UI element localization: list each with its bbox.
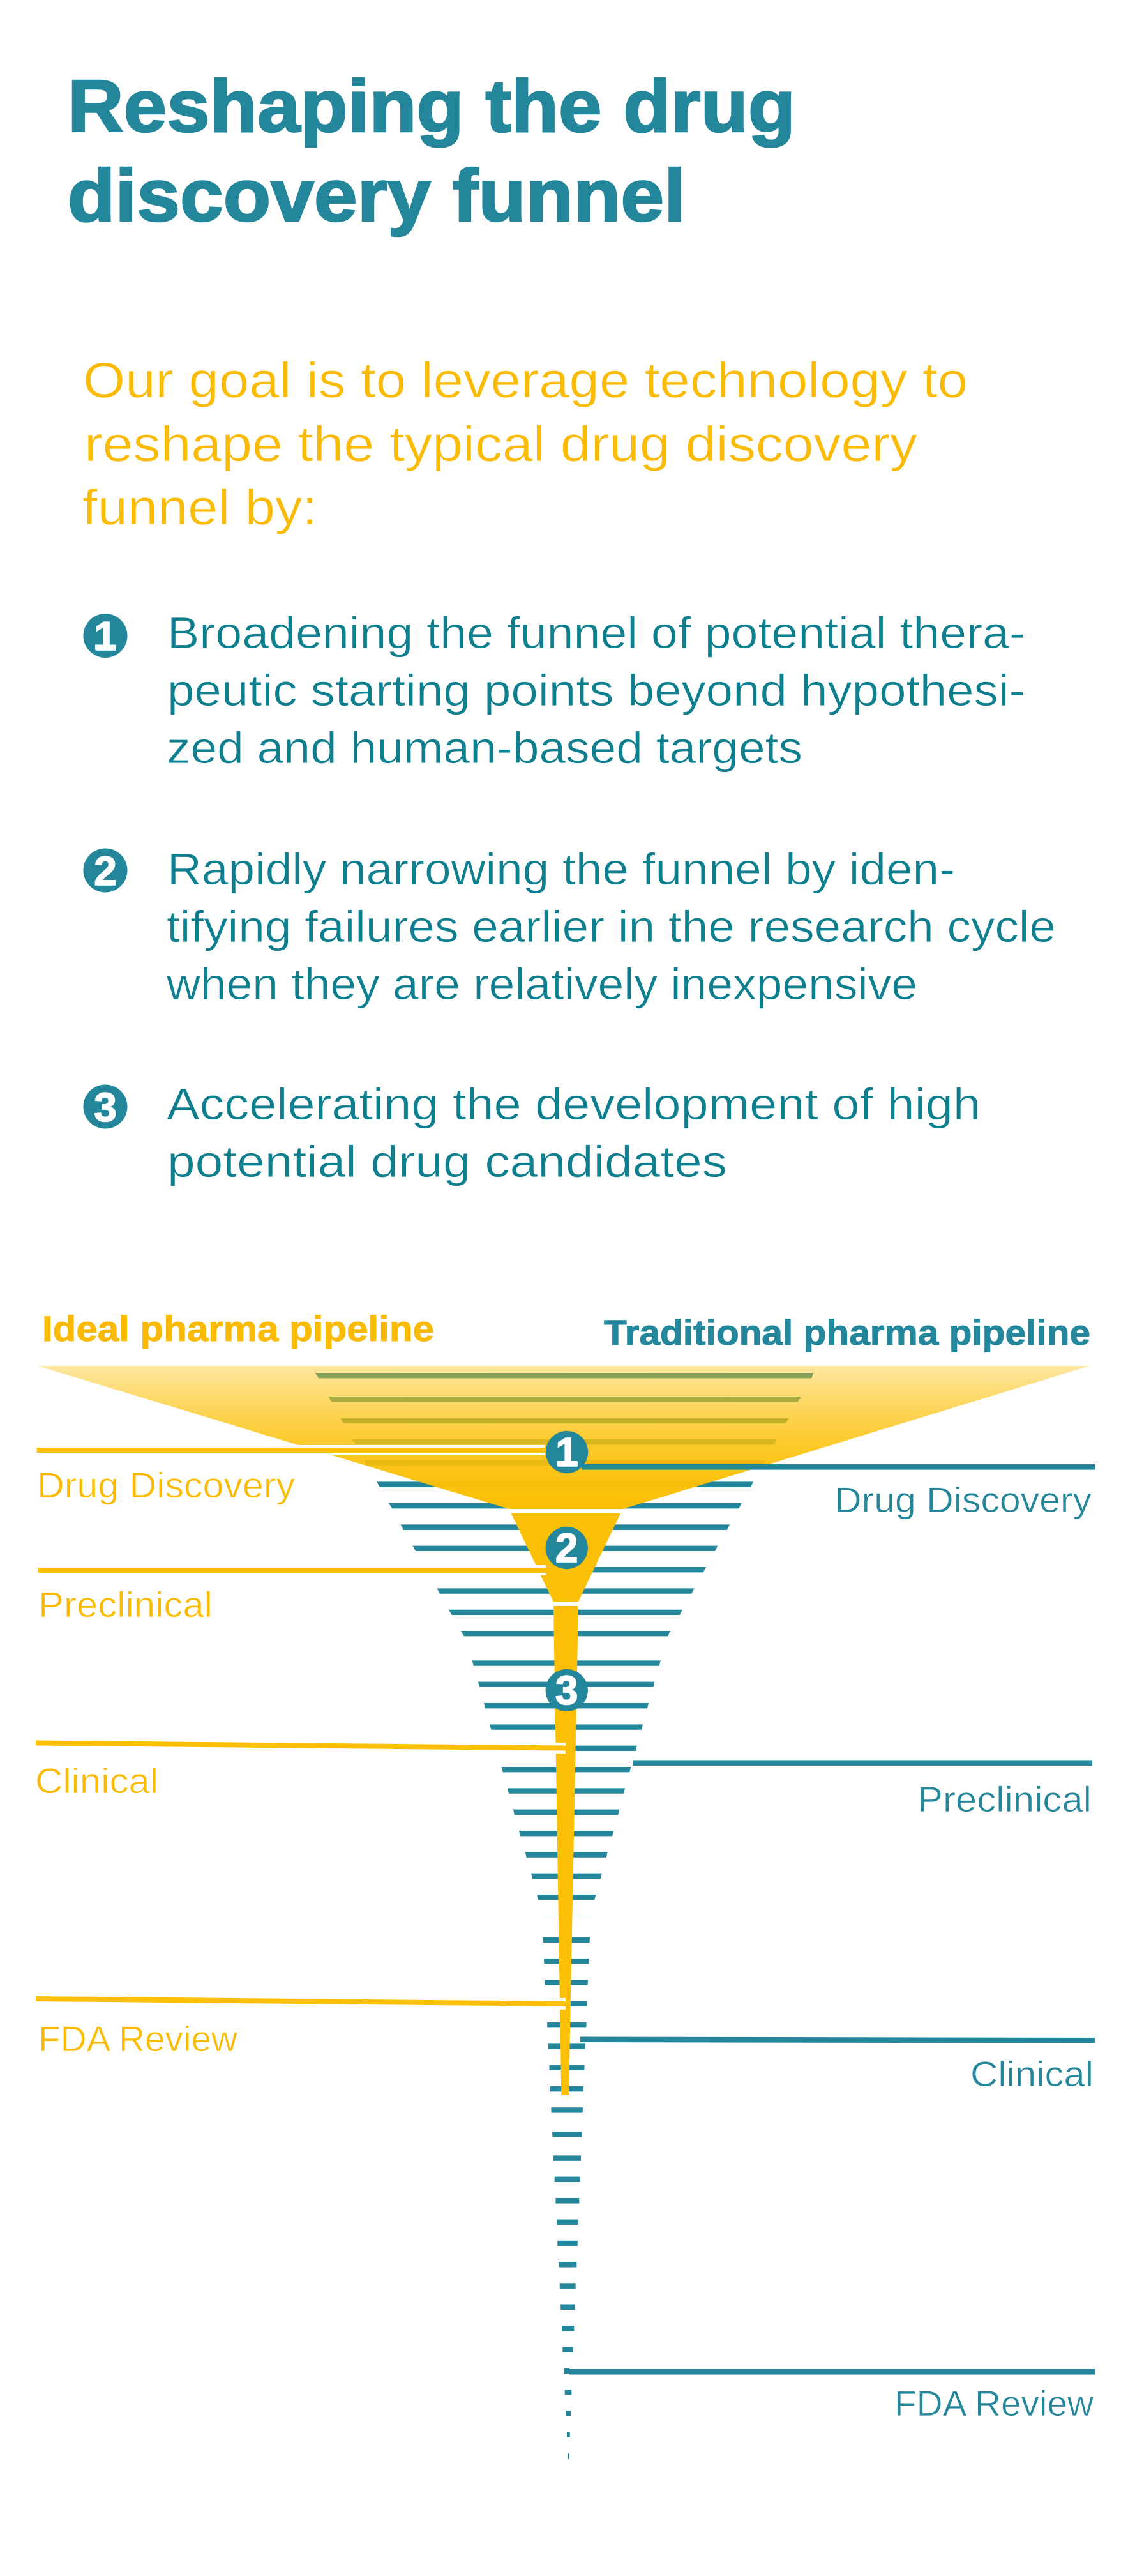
icon: number 2: 2	[94, 848, 117, 894]
intro text: reshape the typical drug discovery	[84, 416, 917, 472]
traditional pipeline labels	[834, 1480, 1094, 2423]
item 1 text: zed and human-based targets	[167, 723, 802, 773]
item 2 text: tifying failures earlier in the research cycle	[167, 902, 1056, 951]
ideal funnel: clinical stalk	[553, 1606, 578, 2095]
heading: traditional pipeline: Traditional pharma pipeline	[604, 1312, 1090, 1352]
list item 1	[83, 608, 1025, 773]
item 1 text: peutic starting points beyond hypothesi-	[167, 665, 1025, 715]
traditional pipeline labels: Clinical	[970, 2054, 1094, 2094]
intro text: Our goal is to leverage technology to	[83, 352, 968, 408]
icon: number 2	[83, 848, 128, 894]
item 2 text: Rapidly narrowing the funnel by iden-	[167, 844, 955, 894]
intro text	[82, 352, 968, 535]
funnel number 2: 2	[555, 1525, 578, 1571]
title: Reshaping the drug	[68, 64, 795, 148]
traditional funnel bars	[315, 1373, 814, 2459]
title	[68, 64, 795, 237]
funnel number 1: 1	[555, 1429, 578, 1475]
title: discovery funnel	[68, 154, 686, 237]
traditional pipeline labels: Drug Discovery	[834, 1480, 1092, 1520]
traditional pipeline stage markers	[569, 1464, 1095, 2374]
list item 2	[83, 844, 1056, 1009]
funnel number 1	[546, 1429, 588, 1475]
intro text: funnel by:	[82, 479, 317, 535]
item 3 text: potential drug candidates	[167, 1137, 727, 1186]
item 1 text: Broadening the funnel of potential thera-	[167, 608, 1025, 658]
traditional pipeline labels: Preclinical	[917, 1779, 1092, 1819]
ideal funnel: discovery stage	[38, 1366, 1090, 1509]
funnel number 2	[545, 1525, 588, 1571]
item 1 text	[167, 608, 1025, 773]
ideal pipeline labels: Clinical	[35, 1761, 158, 1801]
ideal pipeline labels: Drug Discovery	[37, 1465, 295, 1505]
ideal pipeline labels: FDA Review	[38, 2019, 238, 2059]
heading: ideal pipeline: Ideal pharma pipeline	[42, 1308, 434, 1349]
traditional pipeline labels: FDA Review	[894, 2383, 1094, 2423]
icon: number 1: 1	[94, 613, 117, 659]
item 3 text: Accelerating the development of high	[167, 1079, 981, 1129]
item 2 text	[166, 844, 1056, 1009]
item 2 text: when they are relatively inexpensive	[166, 959, 917, 1009]
icon: number 3	[83, 1084, 128, 1130]
icon: number 3: 3	[94, 1084, 117, 1130]
icon: number 1	[83, 613, 128, 659]
item 3 text	[167, 1079, 981, 1186]
ideal funnel: preclinical stage	[511, 1513, 620, 1602]
ideal pipeline stage markers	[0, 1445, 566, 2010]
funnel number 3: 3	[555, 1667, 578, 1713]
ideal pipeline labels	[35, 1465, 295, 2059]
list item 3	[83, 1079, 981, 1186]
funnel number 3	[545, 1667, 588, 1713]
ideal pipeline labels: Preclinical	[38, 1584, 213, 1625]
